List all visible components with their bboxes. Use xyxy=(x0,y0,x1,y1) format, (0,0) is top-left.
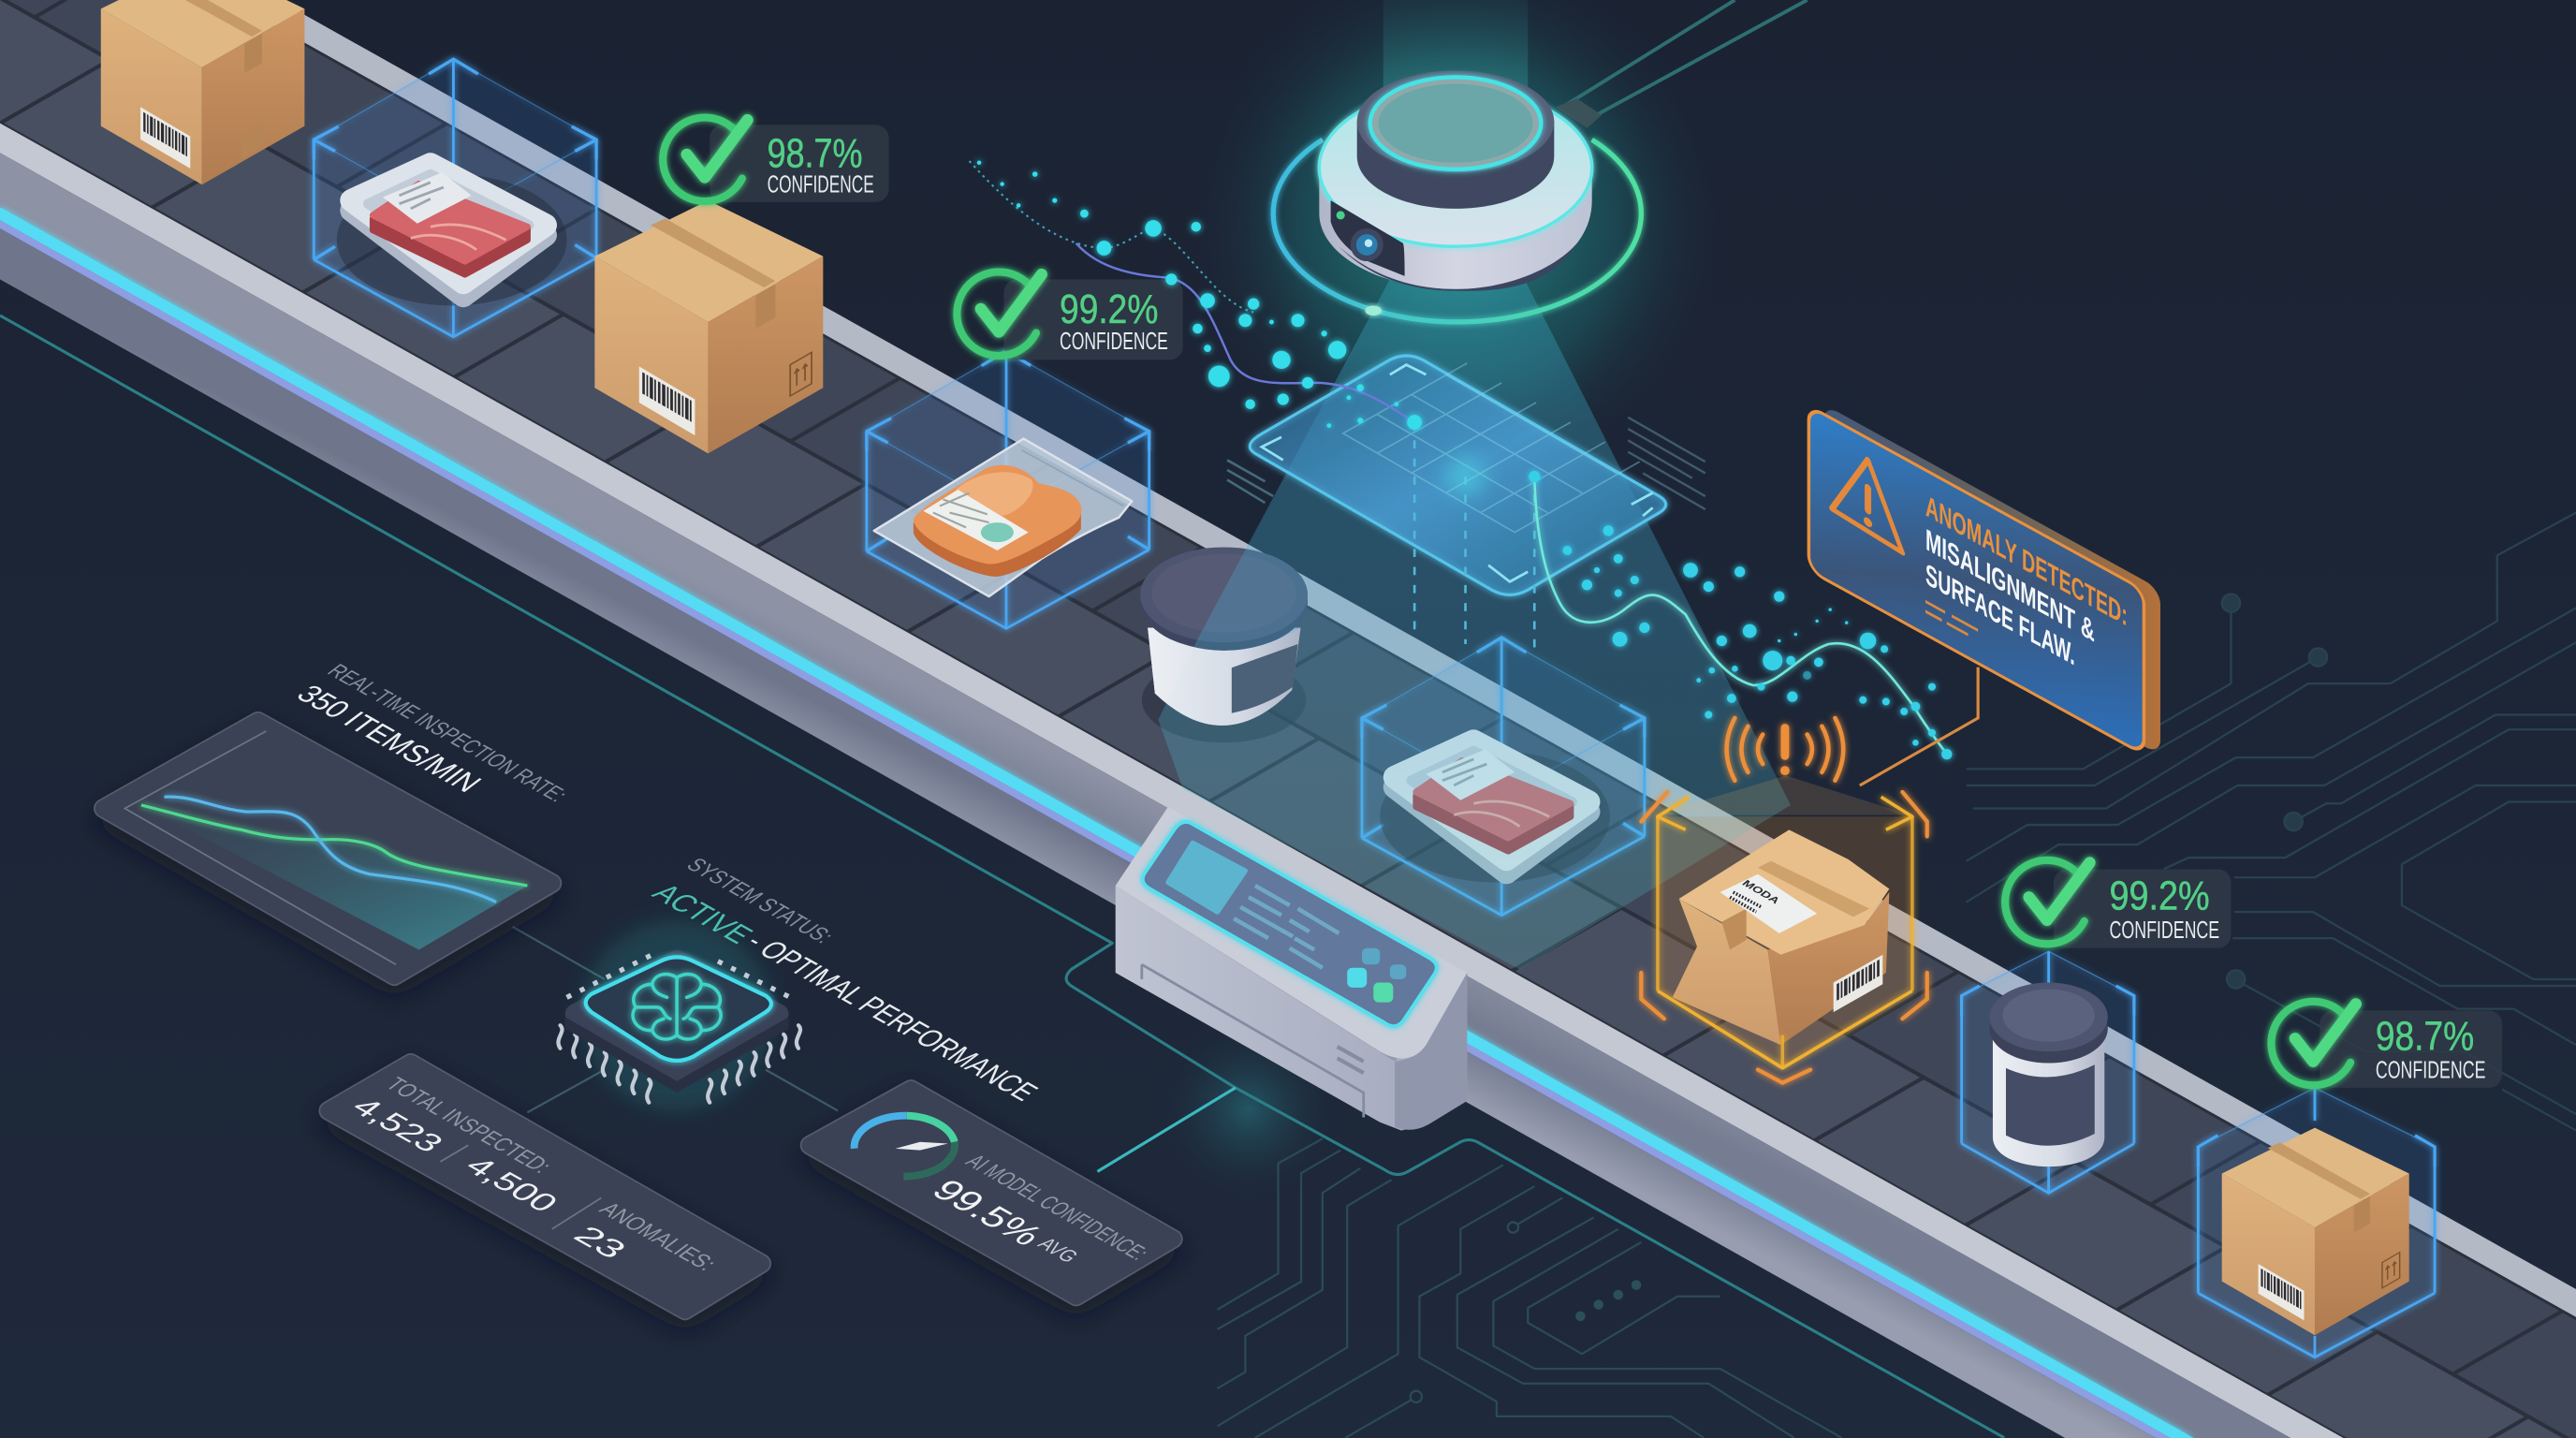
side data lines right xyxy=(1628,418,1705,509)
ai confidence value: 99.5% xyxy=(923,1174,1051,1252)
average suffix: AVG xyxy=(1032,1234,1084,1266)
anomalies value: 23 xyxy=(565,1221,634,1264)
passed value: 4,500 xyxy=(458,1152,565,1218)
chip bottom pins xyxy=(558,1025,800,1103)
confidence badge 99.2 lower: 99.2% xyxy=(2110,873,2210,918)
console screen xyxy=(1143,822,1437,1026)
bounding cube: vacuum pack xyxy=(867,351,1149,628)
panel connector xyxy=(1860,668,1978,785)
panel: totals xyxy=(329,1064,761,1311)
panel: rate chart xyxy=(104,721,552,976)
plane grid lines xyxy=(1342,363,1640,533)
inspection rate caption: REAL-TIME INSPECTION RATE: xyxy=(322,661,573,806)
shipping label xyxy=(1720,874,1817,933)
chart green line xyxy=(141,805,527,886)
stat dividers xyxy=(440,1145,601,1229)
console front xyxy=(1116,886,1467,1131)
package: cardboard box two xyxy=(594,200,823,453)
confidence badge 98.7 upper: CONFIDENCE xyxy=(768,171,874,198)
confidence badge 98.7 lower: CONFIDENCE xyxy=(2376,1057,2485,1083)
bounding cube: meat tray lower xyxy=(1362,638,1645,916)
chip top pins xyxy=(567,955,790,997)
confidence badge 99.2 lower xyxy=(2005,860,2231,948)
top vertical light column xyxy=(1383,0,1528,131)
damaged cardboard box: MODA xyxy=(1739,878,1782,905)
confidence badge 98.7 lower: 98.7% xyxy=(2376,1014,2474,1060)
status performance phrase: - OPTIMAL PERFORMANCE xyxy=(739,929,1045,1107)
confidence badge 99.2 lower: CONFIDENCE xyxy=(2110,917,2219,944)
confidence badge 99.2 upper: CONFIDENCE xyxy=(1060,329,1168,355)
system status label xyxy=(645,855,1045,1107)
anomaly detected panel xyxy=(1808,396,2160,785)
bounding cube: jar xyxy=(1962,951,2134,1193)
anomaly line two: SURFACE FLAW. xyxy=(1925,557,2075,672)
warning triangle xyxy=(1832,440,1902,552)
gauge arc xyxy=(855,1116,955,1177)
total inspected caption: TOTAL INSPECTED: xyxy=(380,1074,557,1177)
dashboard connector lines xyxy=(513,927,838,1112)
dashed drop lines xyxy=(1414,422,1534,651)
front rail upper side xyxy=(0,153,2291,1438)
data stream curve upper xyxy=(970,160,1422,430)
chart area fill xyxy=(141,805,527,949)
anomalies caption: ANOMALIES: xyxy=(593,1198,722,1275)
confidence badge 99.2 upper xyxy=(957,271,1183,360)
cyan lid ring xyxy=(1370,77,1541,169)
inspection rate value: 350 ITEMS/MIN xyxy=(289,681,488,798)
panel face xyxy=(1808,406,2144,755)
console side xyxy=(1395,973,1467,1130)
front rail lower side xyxy=(0,228,2156,1438)
camera light beam xyxy=(1158,279,1791,970)
cardboard box xyxy=(2222,1128,2409,1335)
chip cyan frame xyxy=(586,957,771,1061)
dark cylinder xyxy=(1357,122,1554,209)
cube front edge xyxy=(2314,1336,2316,1357)
status active word: ACTIVE xyxy=(645,879,759,949)
periwinkle strip xyxy=(0,220,2171,1438)
confidence badge 98.7 lower xyxy=(2271,1002,2502,1088)
gauge needle xyxy=(896,1142,948,1151)
scanner console xyxy=(1116,807,1467,1131)
anomaly line one: MISALIGNMENT & xyxy=(1925,522,2095,649)
food tray with red meat xyxy=(1380,741,1610,882)
alert signal icon xyxy=(1727,718,1843,781)
inspection rate label xyxy=(289,661,573,806)
screen thumbnail xyxy=(1168,843,1245,912)
vacuum sealed orange food xyxy=(874,439,1132,596)
amber bounding cube with damaged box xyxy=(1641,792,1927,1083)
central glow point xyxy=(1445,457,1486,496)
bounding cube: last box xyxy=(2198,1088,2435,1357)
camera window xyxy=(1331,200,1405,276)
confidence badge 98.7 upper: 98.7% xyxy=(768,130,862,176)
orbit ring xyxy=(1273,139,1641,322)
chip body xyxy=(575,960,779,1071)
bounding cube: top tray xyxy=(314,59,596,337)
package: cup body over beam xyxy=(1148,627,1301,726)
dark lidded jar xyxy=(1989,983,2108,1167)
chart axes xyxy=(124,731,396,964)
camera body top xyxy=(1319,89,1592,246)
package: cup lid xyxy=(1140,547,1308,742)
background circuit traces bottom xyxy=(1218,1138,1841,1438)
amber outer brackets xyxy=(1641,792,1927,1083)
panel: confidence gauge xyxy=(810,1090,1173,1297)
camera lens xyxy=(1337,211,1383,261)
data points upper xyxy=(977,160,1422,430)
side data lines left xyxy=(1227,460,1273,503)
confidence badge 98.7 upper xyxy=(663,117,889,202)
amber inner frame xyxy=(1658,797,1912,1068)
AI camera xyxy=(1273,0,1808,322)
anomaly heading: ANOMALY DETECTED: xyxy=(1925,489,2128,634)
AI brain chip xyxy=(558,920,800,1110)
package: top-left cardboard box xyxy=(101,0,304,184)
total value: 4,523 xyxy=(344,1093,450,1158)
vent slot xyxy=(1142,964,1364,1117)
screen buttons xyxy=(1347,948,1406,1003)
orange text bars xyxy=(1925,601,1978,640)
background circuit traces right xyxy=(1967,513,2576,1131)
damaged cardboard box xyxy=(1673,829,1889,1045)
plane corner marks xyxy=(1262,365,1653,581)
glowing cyan strip xyxy=(0,207,2194,1438)
status caption: SYSTEM STATUS: xyxy=(681,855,839,947)
ring node xyxy=(1365,305,1382,315)
food tray with red meat xyxy=(337,165,567,305)
data stream curve lower xyxy=(1529,471,1952,759)
glow around camera xyxy=(1186,0,1728,493)
camera arm xyxy=(1566,0,1808,118)
teal node glow xyxy=(1150,1010,1347,1208)
chart blue line xyxy=(165,797,496,902)
console top xyxy=(1116,807,1467,1059)
data points lower xyxy=(1529,471,1952,759)
screen text lines xyxy=(1234,886,1339,968)
teal circuit line to scanner console xyxy=(0,315,2004,1438)
confidence badge 99.2 upper: 99.2% xyxy=(1060,286,1158,332)
amber warning beam xyxy=(1654,775,1910,815)
panel thickness xyxy=(1823,404,2160,756)
ai confidence caption: AI MODEL CONFIDENCE: xyxy=(959,1151,1154,1264)
camera body side xyxy=(1319,168,1592,289)
scanning plane with grid xyxy=(1250,356,1666,651)
brain icon xyxy=(633,975,721,1039)
